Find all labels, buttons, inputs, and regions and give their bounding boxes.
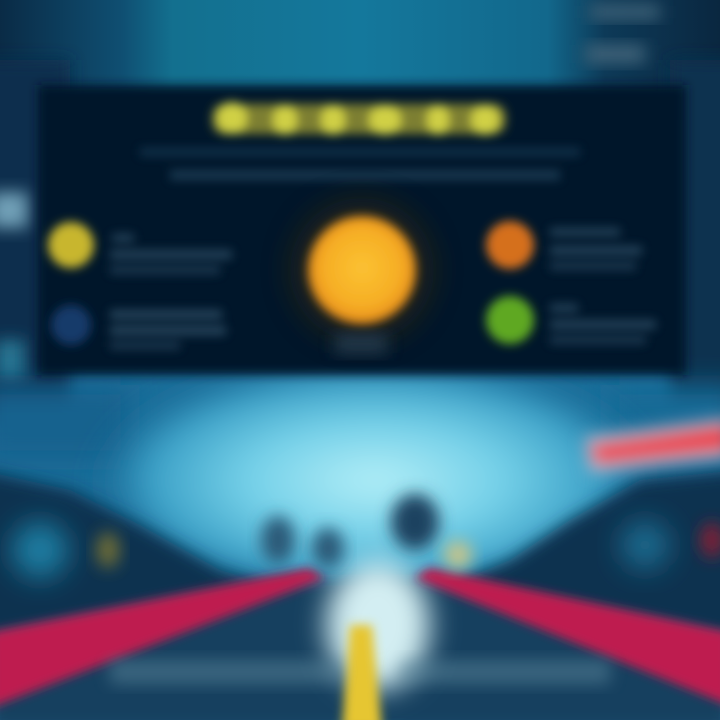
icon: central sun [290,198,434,342]
road [0,560,720,720]
text block: upper left [110,234,232,274]
icon: green circle [486,296,534,344]
panel: dark info board [38,85,686,375]
subtitle lines [140,148,580,180]
heading [212,102,506,135]
icon: blue circle [51,305,91,345]
caption: central [335,335,387,353]
icon: yellow circle [48,222,94,268]
city silhouettes [0,470,720,640]
text block: upper right [550,228,642,270]
text block: lower left [110,310,226,349]
icon: orange circle [486,221,534,269]
text block: lower right [550,304,656,344]
silhouettes of people [261,494,472,569]
red sign [585,418,720,472]
